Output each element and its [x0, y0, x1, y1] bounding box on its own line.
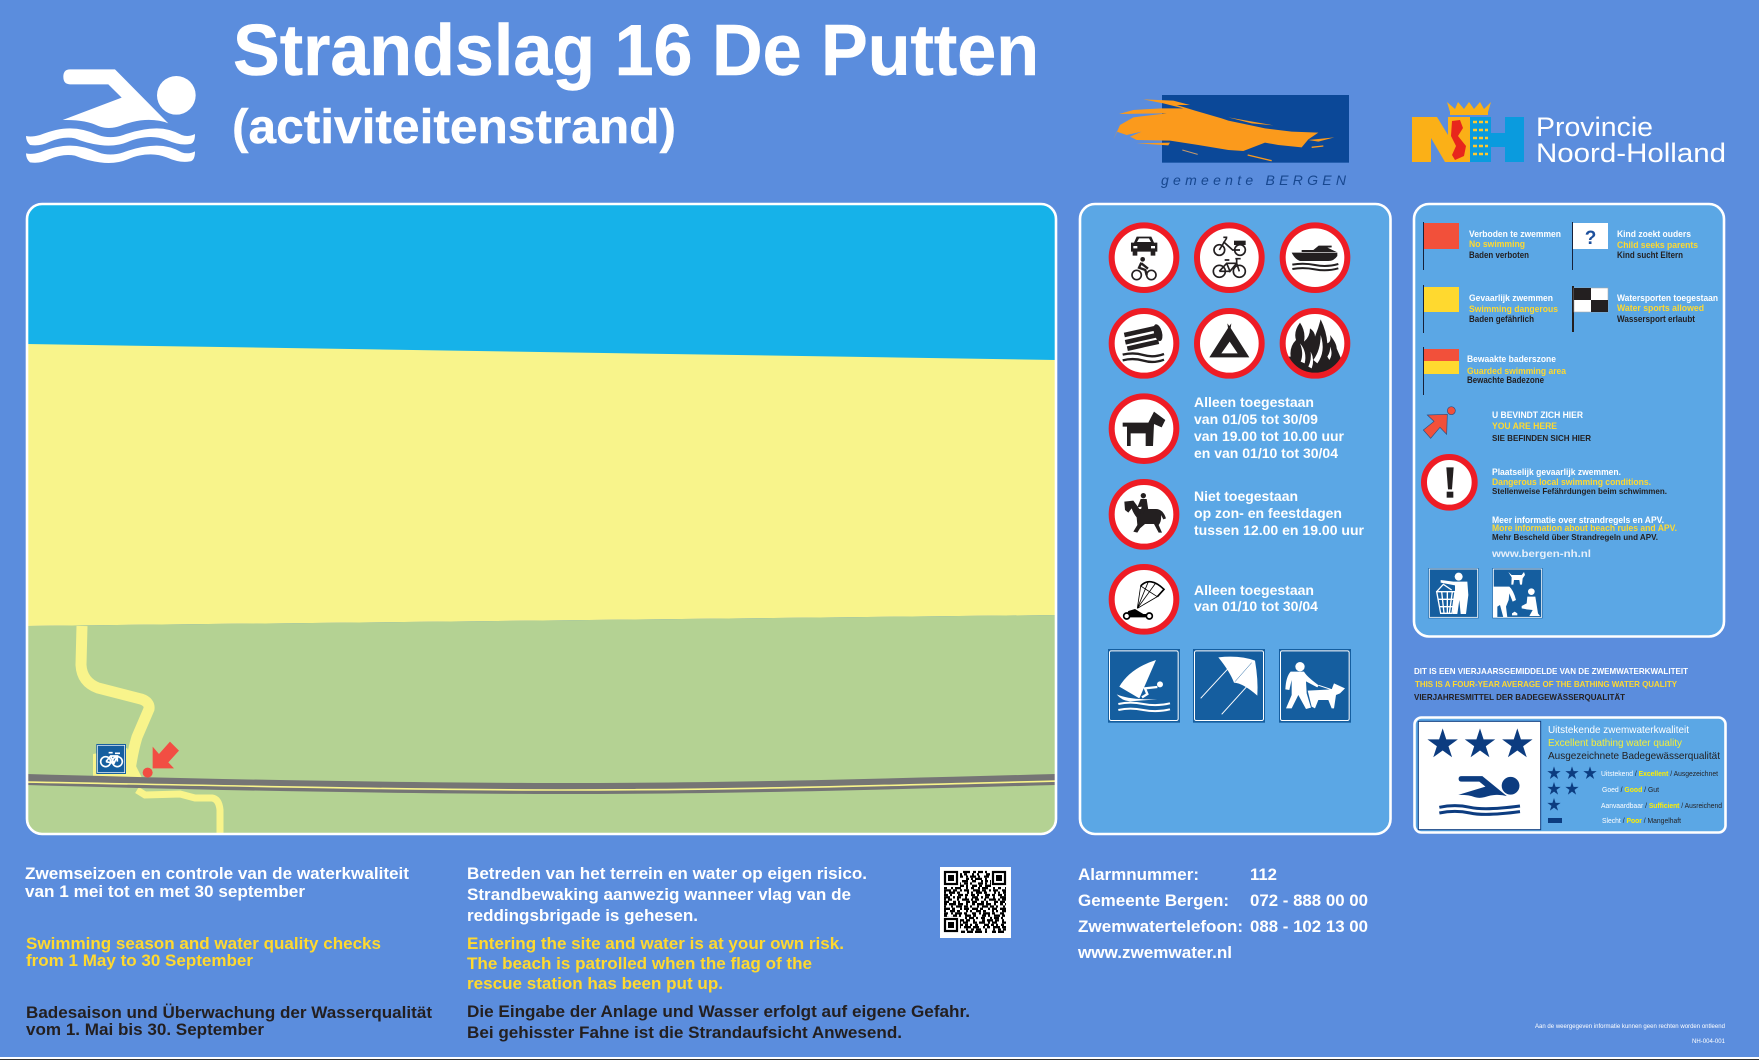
- map: road: [26, 774, 1058, 794]
- text: own risk notice: Bei gehisster Fahne ist die Strandaufsicht Anwesend.: [467, 1023, 902, 1042]
- flag: no swimming: Verboden te zwemmen: [1469, 229, 1561, 240]
- text: local danger: Plaatselijk gevaarlijk zwemmen.: [1492, 467, 1621, 477]
- flag: guarded swimming area: Guarded swimming area: [1467, 366, 1567, 377]
- text: excellent rating: Excellent bathing water quality: [1548, 737, 1683, 749]
- map: sea: [26, 203, 1058, 363]
- flag: no swimming: [1423, 222, 1561, 270]
- flag: water sports allowed: Wassersport erlaubt: [1617, 314, 1695, 324]
- text: swimming season: vom 1. Mai bis 30. September: [26, 1020, 264, 1039]
- text: local danger: [1492, 467, 1667, 496]
- flag: swimming dangerous: Gevaarlijk zwemmen: [1469, 293, 1553, 304]
- subtitle: (activiteitenstrand): [232, 101, 676, 154]
- text: contact numbers: Zwemwatertelefoon:: [1078, 917, 1243, 936]
- flag: guarded swimming area: Bewaakte baderszone: [1467, 354, 1556, 365]
- icon: no fires: [1283, 311, 1347, 377]
- flag: child seeks parents: Child seeks parents: [1617, 240, 1698, 251]
- text: more information: [1491, 515, 1677, 560]
- logo: Provincie Noord-Holland: Noord-Holland: [1536, 138, 1726, 168]
- text: dog rule: [1194, 394, 1345, 461]
- text: sign code: NH-004-001: [1692, 1038, 1725, 1045]
- panel: prohibitions and rules: [1080, 204, 1390, 834]
- flag: child seeks parents: Kind sucht Eltern: [1617, 250, 1683, 260]
- text: swimming season: van 1 mei tot en met 30 september: [25, 882, 305, 901]
- text: horse rule: [1194, 488, 1365, 538]
- text: own risk notice: Die Eingabe der Anlage und Wasser erfolgt auf eigene Gefahr.: [467, 1002, 970, 1021]
- text: horse rule: tussen 12.00 en 19.00 uur: [1194, 522, 1365, 538]
- logo: gemeente Bergen: gemeente BERGEN: [1161, 172, 1347, 188]
- text: horse rule: op zon- en feestdagen: [1194, 505, 1342, 521]
- logo: Provincie Noord-Holland: Provincie: [1536, 112, 1653, 142]
- text: more information: More information about beach rules and APV.: [1492, 523, 1677, 533]
- map: beach: [26, 344, 1058, 626]
- text: rating legend: Slecht / Poor / Mangelhaft: [1602, 818, 1681, 825]
- text: rating legend: Uitstekend / Excellent / Ausgezeichnet: [1601, 771, 1718, 778]
- text: local danger: Dangerous local swimming conditions.: [1492, 477, 1651, 487]
- icon: no littering: [1428, 568, 1479, 618]
- icon: dogs restricted: [1112, 396, 1176, 461]
- flag: guarded swimming area: Bewachte Badezone: [1467, 375, 1544, 385]
- flag: swimming dangerous: Baden gefährlich: [1469, 314, 1534, 324]
- text: dog rule: en van 01/10 tot 30/04: [1194, 445, 1338, 461]
- text: excellent rating: Uitstekende zwemwaterkwaliteit: [1548, 724, 1689, 736]
- panel: flags and legend: [1414, 204, 1724, 636]
- icon: horses restricted: [1112, 482, 1176, 547]
- flag: no swimming: No swimming: [1469, 239, 1525, 250]
- icon: you are here arrow: [1423, 407, 1455, 438]
- text: rating legend: [1601, 771, 1722, 825]
- icon: dog walking: [1279, 649, 1351, 723]
- text: four-year average: THIS IS A FOUR-YEAR AVERAGE OF THE BATHING WATER QUALITY: [1415, 679, 1677, 689]
- map: dunes: [26, 615, 1058, 836]
- text: dog rule: van 19.00 tot 10.00 uur: [1194, 428, 1345, 444]
- text: horse rule: Niet toegestaan: [1194, 488, 1298, 504]
- flag: swimming dangerous: [1423, 285, 1558, 333]
- text: swimming season: Zwemseizoen en controle van de waterkwaliteit: [25, 864, 409, 883]
- text: own risk notice: [467, 864, 970, 1042]
- rating stars: [1547, 766, 1597, 823]
- text: contact numbers: www.zwemwater.nl: [1077, 943, 1232, 962]
- text: four-year average: VIERJAHRESMITTEL DER BADEGEWÄSSERQUALITÄT: [1414, 692, 1626, 702]
- icon: clean up after animals: [1492, 568, 1543, 618]
- icon: kite surfing: [1193, 649, 1265, 723]
- map: yellow paths: [81, 626, 220, 836]
- icon: no camping: [1197, 311, 1262, 376]
- icon: local danger warning: [1424, 457, 1475, 508]
- text: local danger: Stellenweise Fefährdungen beim schwimmen.: [1492, 486, 1667, 496]
- text: disclaimer: Aan de weergegeven informatie kunnen geen rechten worden ontleend: [1535, 1023, 1725, 1030]
- text: dog rule: van 01/05 tot 30/09: [1194, 411, 1318, 427]
- text: own risk notice: Betreden van het terrein en water op eigen risico.: [467, 864, 867, 883]
- icon: bicycle route sign: [96, 744, 126, 774]
- text: kite buggy rule: van 01/10 tot 30/04: [1194, 598, 1318, 614]
- icon: you are here arrow: [143, 742, 179, 778]
- panel: map: [26, 203, 1058, 836]
- text: contact numbers: 072 - 888 00 00: [1250, 891, 1368, 910]
- icon: windsurfing: [1108, 649, 1180, 723]
- icon: no mopeds or bicycles: [1197, 225, 1262, 290]
- icon: kite buggies restricted: [1112, 567, 1176, 632]
- text: swimming season: Badesaison und Überwachung der Wasserqualität: [26, 1003, 432, 1022]
- flag: water sports allowed: [1572, 286, 1718, 332]
- logo: Provincie Noord-Holland: [1412, 102, 1726, 168]
- text: swimming season: [25, 864, 432, 1039]
- flag: child seeks parents: [1572, 222, 1698, 270]
- flag: water sports allowed: Watersporten toegestaan: [1617, 293, 1718, 304]
- text: four-year average: [1414, 666, 1689, 702]
- text: dog rule: Alleen toegestaan: [1194, 394, 1314, 410]
- text: you are here: U BEVINDT ZICH HIER: [1492, 410, 1583, 421]
- flag: no swimming: Baden verboten: [1469, 250, 1529, 260]
- QR code: [940, 867, 1011, 938]
- flag: swimming dangerous: Swimming dangerous: [1469, 304, 1558, 315]
- text: more information: Mehr Bescheld über Strandregeln und APV.: [1492, 532, 1658, 542]
- text: rating legend: Goed / Good / Gut: [1602, 787, 1659, 794]
- flag: child seeks parents: Kind zoekt ouders: [1617, 229, 1691, 240]
- text: you are here: SIE BEFINDEN SICH HIER: [1492, 433, 1591, 443]
- icon: three stars swimmer: [1418, 721, 1541, 830]
- text: more information: Meer informatie over strandregels en APV.: [1492, 515, 1664, 525]
- icon: no inflatables: [1112, 311, 1176, 376]
- title: Strandslag 16 De Putten: [233, 11, 1039, 91]
- text: swimming season: Swimming season and water quality checks: [26, 934, 381, 953]
- text: you are here: [1492, 410, 1591, 443]
- panel: water quality: [1414, 718, 1726, 832]
- text: excellent rating: [1548, 724, 1720, 762]
- logo: gemeente Bergen: [1113, 95, 1349, 188]
- text: more information: www.bergen-nh.nl: [1491, 548, 1591, 560]
- text: kite buggy rule: Alleen toegestaan: [1194, 582, 1314, 598]
- text: own risk notice: reddingsbrigade is gehesen.: [467, 906, 698, 925]
- text: excellent rating: Ausgezeichnete Badegewässerqualität: [1548, 750, 1720, 762]
- text: own risk notice: rescue station has been put up.: [467, 974, 723, 993]
- text: you are here: YOU ARE HERE: [1492, 421, 1557, 432]
- flag: child seeks parents: ?: [1585, 228, 1596, 249]
- text: contact numbers: Gemeente Bergen:: [1078, 891, 1229, 910]
- text: own risk notice: The beach is patrolled when the flag of the: [467, 954, 812, 973]
- text: contact numbers: 112: [1250, 865, 1277, 884]
- text: swimming season: from 1 May to 30 September: [26, 951, 253, 970]
- text: four-year average: DIT IS EEN VIERJAARSGEMIDDELDE VAN DE ZWEMWATERKWALITEIT: [1414, 666, 1689, 676]
- text: own risk notice: Entering the site and water is at your own risk.: [467, 934, 844, 953]
- icon: swimmer: [26, 69, 196, 163]
- text: contact numbers: Alarmnummer:: [1078, 865, 1199, 884]
- flag: water sports allowed: Water sports allowed: [1617, 303, 1704, 314]
- text: contact numbers: [1077, 865, 1368, 962]
- icon: no motorboats: [1283, 225, 1347, 290]
- text: own risk notice: Strandbewaking aanwezig wanneer vlag van de: [467, 885, 851, 904]
- text: kite buggy rule: [1194, 582, 1318, 614]
- text: rating legend: Aanvaardbaar / Sufficient / Ausreichend: [1601, 803, 1722, 810]
- text: contact numbers: 088 - 102 13 00: [1250, 917, 1368, 936]
- flag: guarded swimming area: [1423, 347, 1567, 395]
- icon: no cars or motorcycles: [1112, 225, 1176, 290]
